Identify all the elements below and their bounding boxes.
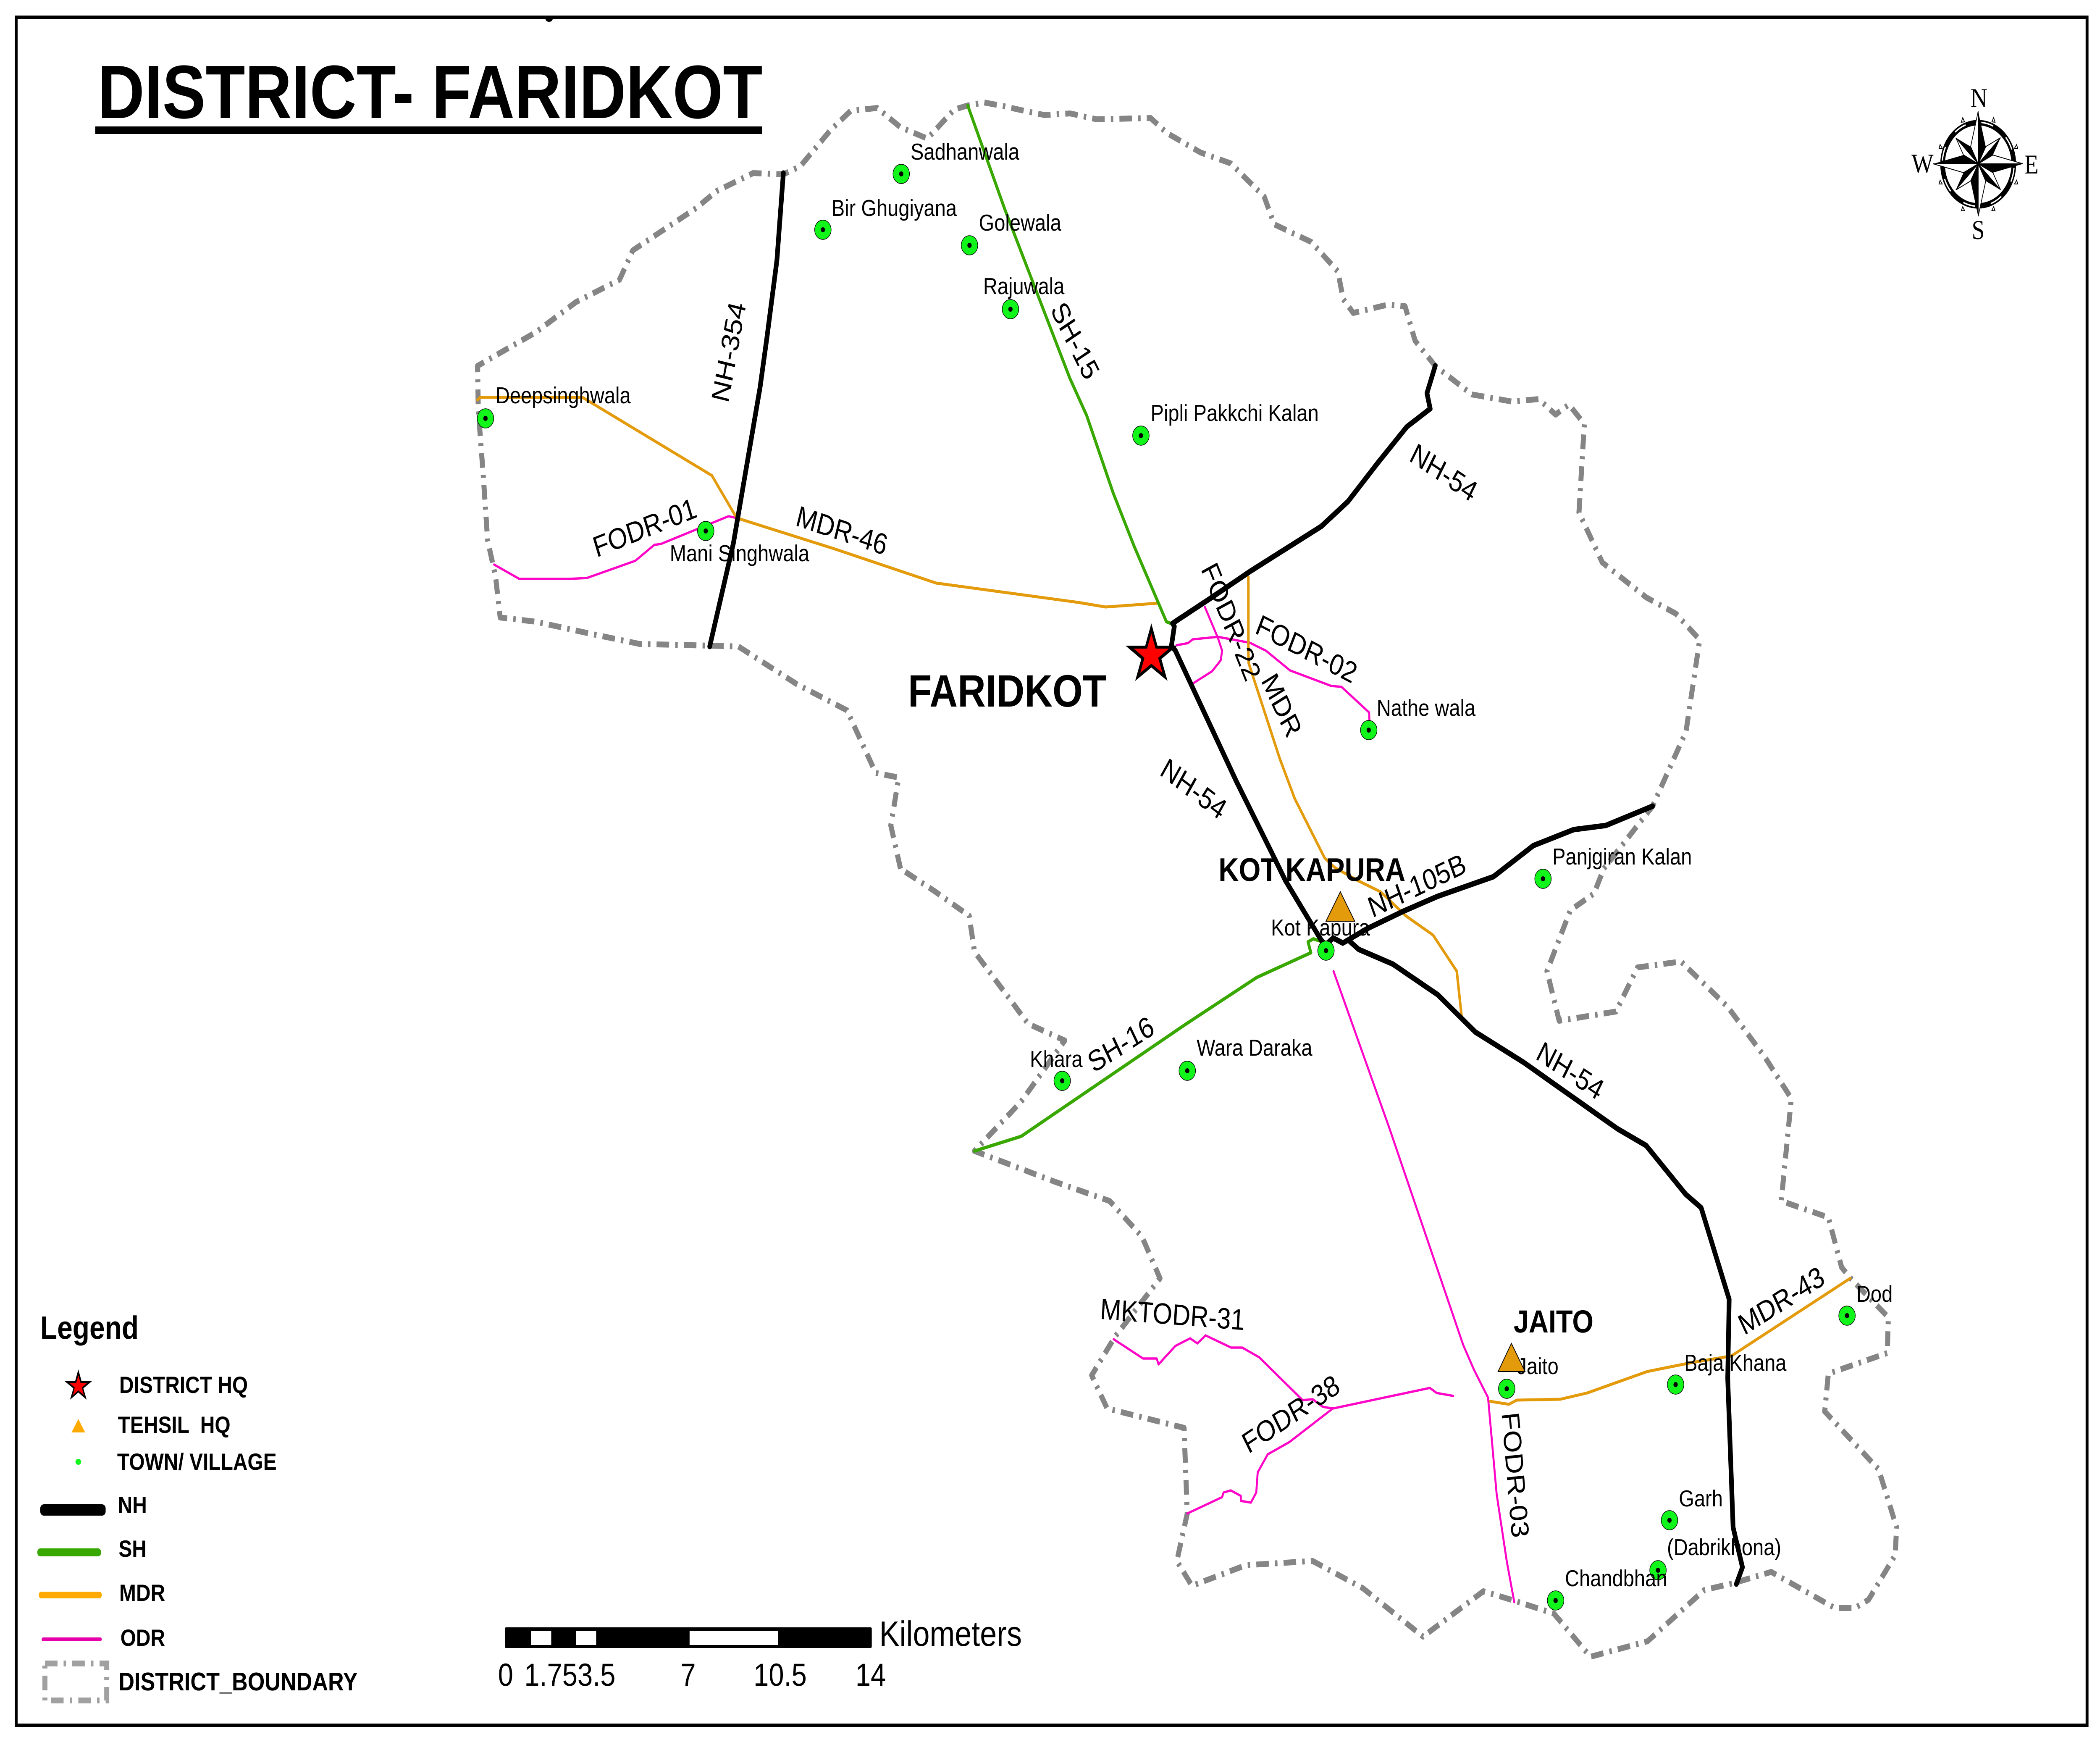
- legend: ODR: [42, 1624, 165, 1651]
- village names: Dod: [1856, 1281, 1893, 1307]
- road labels: MDR-43: [1733, 1260, 1829, 1341]
- legend: tehsil HQ: TEHSIL HQ: [118, 1411, 231, 1438]
- village names: Sadhanwala: [911, 139, 1019, 165]
- legend: MDR: MDR: [119, 1579, 165, 1606]
- village names: Garh: [1679, 1485, 1723, 1511]
- village names: Khara: [1030, 1046, 1083, 1072]
- scale bar: Kilometers: [879, 1614, 1022, 1653]
- village names: Panjgiran Kalan: [1552, 844, 1692, 870]
- legend: [37, 1310, 358, 1700]
- label: Jaito tehsil: JAITO: [1514, 1304, 1593, 1340]
- legend: district boundary: DISTRICT_BOUNDARY: [118, 1667, 358, 1696]
- village markers: [477, 164, 1855, 1610]
- district headquarters star: [1126, 623, 1177, 681]
- national highways (NH): [710, 173, 1743, 1584]
- village names: Wara Daraka: [1197, 1035, 1312, 1061]
- north arrow compass: E: [2024, 150, 2039, 180]
- village names: Baja Khana: [1684, 1350, 1787, 1376]
- village names: Kot Kapura: [1271, 914, 1370, 941]
- scale bar: 14: [856, 1657, 886, 1693]
- road labels: FODR-22: [1196, 558, 1267, 686]
- village names: (Dabrikhona): [1667, 1534, 1781, 1560]
- road labels: MDR-46: [793, 500, 891, 561]
- legend title: Legend: [40, 1310, 139, 1346]
- legend: district boundary: [45, 1663, 358, 1700]
- road labels: FODR-02: [1252, 608, 1361, 690]
- road labels: NH-54: [1405, 437, 1482, 508]
- road labels: NH-54: [1532, 1035, 1609, 1106]
- road labels: FODR-01: [589, 491, 700, 564]
- scale bar: 0: [498, 1657, 513, 1693]
- village names: Deepsinghwala: [496, 382, 631, 408]
- scale bar: 3.5: [578, 1657, 615, 1693]
- district boundary: [478, 102, 1897, 1657]
- road labels: NH-54: [1155, 752, 1232, 826]
- scale bar: 10.5: [753, 1657, 807, 1693]
- north arrow compass: [1911, 83, 2039, 245]
- scale bar: 7: [680, 1657, 696, 1693]
- village names: [496, 139, 1893, 1591]
- legend: district HQ: DISTRICT HQ: [119, 1372, 248, 1398]
- village names: Chandbhan: [1565, 1565, 1667, 1591]
- small mark on top of frame: [546, 16, 553, 22]
- village names: Nathe wala: [1377, 695, 1475, 721]
- north arrow compass: W: [1911, 149, 1934, 179]
- title: DISTRICT- FARIDKOT: [98, 50, 762, 134]
- legend: ODR: ODR: [121, 1624, 165, 1651]
- legend: SH: [37, 1535, 147, 1562]
- road labels: NH-105B: [1364, 847, 1470, 924]
- village names: Bir Ghugiyana: [832, 195, 957, 221]
- road labels: FODR-03: [1496, 1411, 1534, 1539]
- village names: Jaito: [1517, 1353, 1559, 1379]
- scale bar: [498, 1614, 1022, 1693]
- tehsil HQ triangle: Jaito: [1498, 1343, 1525, 1372]
- legend: MDR: [39, 1579, 165, 1606]
- road labels: FODR-38: [1237, 1368, 1344, 1460]
- road labels: [589, 297, 1829, 1539]
- road labels: SH-16: [1083, 1010, 1159, 1079]
- north arrow compass: S: [1971, 215, 1984, 245]
- state highways (SH): [968, 105, 1320, 1151]
- major district roads (MDR): [478, 397, 1850, 1404]
- village names: Pipli Pakkchi Kalan: [1151, 400, 1319, 426]
- road labels: MKTODR-31: [1099, 1293, 1246, 1336]
- legend: SH: SH: [118, 1535, 147, 1562]
- legend: NH: NH: [118, 1492, 147, 1518]
- road labels: SH-15: [1045, 297, 1105, 385]
- road labels: MDR: [1256, 668, 1307, 743]
- road labels: NH-354: [706, 299, 751, 405]
- village names: Mani Singhwala: [670, 540, 809, 566]
- village names: Golewala: [979, 210, 1061, 236]
- north arrow compass: N: [1971, 83, 1987, 113]
- legend: district HQ: [65, 1369, 248, 1400]
- scale bar: 1.75: [524, 1657, 578, 1693]
- village names: Rajuwala: [983, 273, 1065, 299]
- label: Faridkot: FARIDKOT: [908, 665, 1106, 716]
- legend: NH: [40, 1492, 147, 1518]
- label: Kot Kapura tehsil: KOT KAPURA: [1218, 851, 1405, 888]
- tehsil HQ triangle: Kot Kapura: [1326, 892, 1355, 921]
- legend: town or village: TOWN/ VILLAGE: [117, 1448, 277, 1475]
- other district roads (ODR): [494, 516, 1514, 1602]
